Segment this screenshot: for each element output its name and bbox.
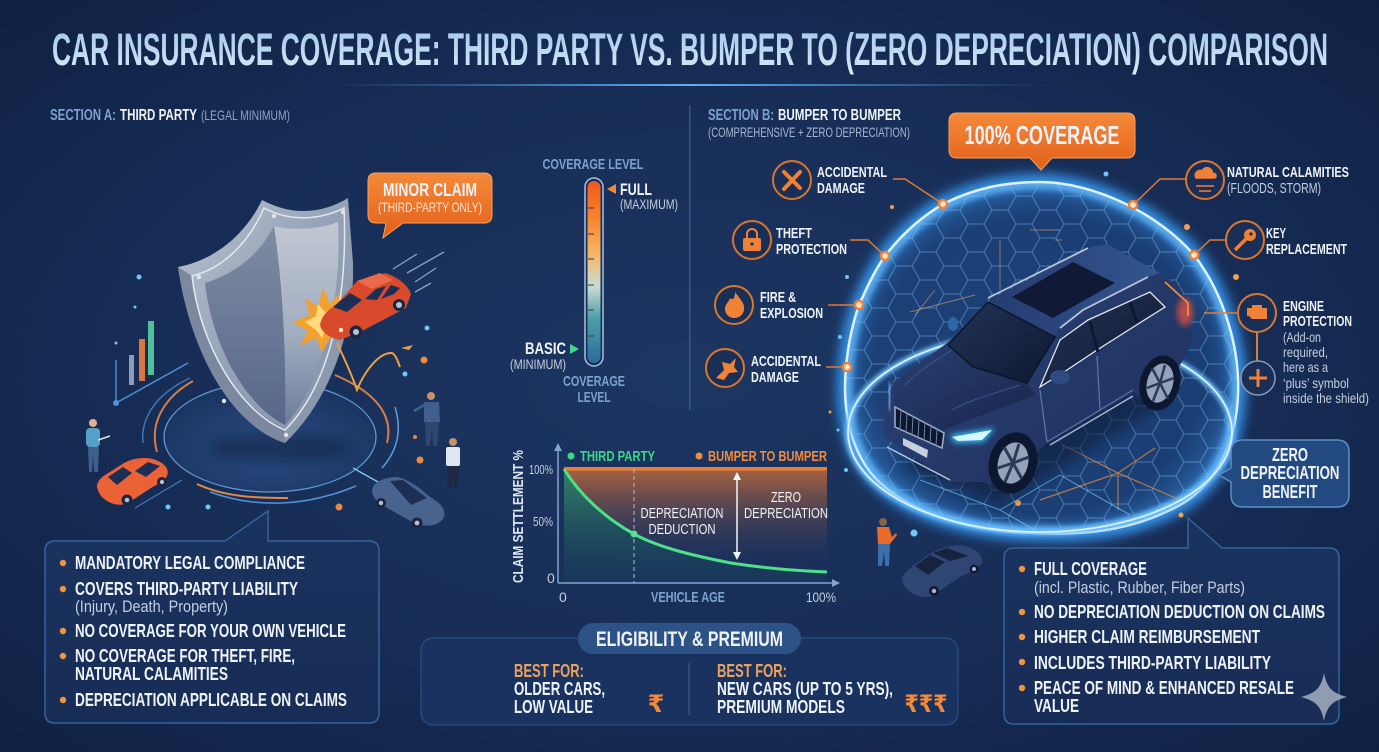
bounce arc [337, 343, 400, 390]
person with tablet [86, 419, 110, 472]
front wheel [982, 427, 1044, 499]
feature: key replacement: REPLACEMENT [1266, 241, 1347, 258]
coverage level gauge: COVERAGE LEVEL [542, 156, 644, 173]
coverage level gauge: FULL [620, 180, 652, 199]
icon: broken part [716, 358, 738, 380]
grille [895, 407, 944, 448]
dome ring [848, 332, 1232, 532]
callout: minor claim: (THIRD-PARTY ONLY) [378, 199, 482, 215]
impact starburst [293, 288, 348, 352]
callout: zero depreciation benefit [1219, 440, 1349, 507]
windshield [948, 302, 1055, 383]
feature: theft protection: THEFT [776, 225, 812, 242]
headlights [889, 383, 995, 443]
side windows [1040, 292, 1165, 387]
feature: accidental damage lower: DAMAGE [751, 369, 799, 386]
red car crash [320, 273, 411, 340]
axis labels: 0 [559, 589, 567, 605]
door lines and sill [1040, 356, 1133, 442]
section B heading: (COMPREHENSIVE + ZERO DEPRECIATION) [708, 124, 910, 140]
section A heading [50, 107, 290, 124]
coverage level gauge: COVERAGE [563, 373, 625, 390]
callout: minor claim: MINOR CLAIM [383, 180, 477, 200]
best for bumper to bumper [717, 661, 948, 718]
feature: fire and explosion: FIRE & [760, 289, 796, 306]
icon: flame [725, 292, 744, 318]
taillight [1165, 282, 1193, 326]
panel: bumper to bumper features: (incl. Plastic, Rubber, Fiber Parts) [1034, 578, 1245, 597]
legend: THIRD PARTY [580, 448, 655, 465]
feature: engine protection: ENGINE [1283, 298, 1324, 315]
orange car [97, 458, 168, 506]
panel: third party features: NATURAL CALAMITIES [75, 664, 228, 684]
best for bumper to bumper: PREMIUM MODELS [717, 697, 845, 717]
icon: padlock [743, 229, 761, 251]
coverage level gauge: LEVEL [578, 389, 610, 406]
coverage level gauge: BASIC [525, 339, 566, 358]
feature: theft protection [733, 221, 889, 260]
roof rails [988, 248, 1148, 328]
eligibility heading: ELIGIBILITY & PREMIUM [596, 628, 783, 651]
feature: fire and explosion [715, 286, 863, 324]
feature: key replacement: KEY [1266, 225, 1286, 242]
person in suit [414, 392, 440, 446]
illustration: protective dome with SUV [830, 170, 1250, 545]
hood [893, 343, 1035, 430]
bumper to bumper line [564, 467, 827, 470]
feature: accidental damage top: ACCIDENTAL [817, 164, 887, 181]
eligibility heading [578, 623, 801, 654]
chart annotations: DEPRECIATION [640, 505, 724, 522]
speed lines [393, 252, 444, 292]
panel: bumper to bumper features: HIGHER CLAIM REIMBURSEMENT [1034, 627, 1260, 647]
callout: zero depreciation benefit: ZERO [1272, 445, 1308, 465]
dark car [902, 545, 982, 597]
panel: third party features: COVERS THIRD-PARTY LIABILITY [75, 579, 298, 599]
feature: engine protection: PROTECTION [1283, 313, 1352, 330]
roof [990, 244, 1160, 335]
panel: bumper to bumper features: INCLUDES THIRD-PARTY LIABILITY [1034, 653, 1271, 673]
panel: bumper to bumper features [1004, 518, 1339, 724]
dome glow [845, 182, 1238, 534]
section B heading: SECTION B: [708, 107, 774, 124]
SUV [883, 244, 1193, 505]
feature: accidental damage lower: ACCIDENTAL [751, 353, 821, 370]
feature: theft protection: PROTECTION [776, 241, 847, 258]
zero depreciation arrow [733, 472, 741, 560]
chart: claim settlement vs vehicle age [510, 443, 840, 606]
axis labels [510, 450, 836, 606]
person with phone [877, 518, 897, 566]
callout: zero depreciation benefit: DEPRECIATION [1240, 463, 1340, 483]
best for third party: BEST FOR: [514, 661, 584, 681]
mirrors [1050, 370, 1070, 384]
feature: engine protection: ‘plus’ symbol [1283, 375, 1349, 391]
section B heading [708, 107, 910, 140]
axis labels: CLAIM SETTLEMENT % [510, 450, 527, 583]
panel: bumper to bumper features: FULL COVERAGE [1034, 559, 1147, 579]
icon: engine [1247, 305, 1267, 319]
best for bumper to bumper: BEST FOR: [717, 661, 787, 681]
area fills [564, 469, 827, 583]
coverage level gauge: (MINIMUM) [510, 356, 566, 372]
chart annotations: ZERO [771, 489, 801, 506]
icon: key [1235, 229, 1256, 250]
icon: tools [784, 172, 800, 189]
panel: third party features: DEPRECIATION APPLICABLE ON CLAIMS [75, 690, 347, 710]
axis labels: 100% [806, 589, 836, 605]
best for third party: OLDER CARS, [514, 679, 605, 699]
glowing dots [114, 274, 430, 510]
glowing dots around dome [828, 172, 1239, 536]
callout: 100% coverage [949, 113, 1135, 170]
panel: bumper to bumper features: PEACE OF MIND & ENHANCED RESALE [1034, 678, 1294, 698]
feature: accidental damage lower [706, 349, 851, 387]
callout: minor claim [368, 173, 492, 238]
panel: third party features: (Injury, Death, Property) [75, 597, 228, 616]
shield [178, 198, 353, 462]
dome body [846, 183, 1237, 532]
feature: fire and explosion: EXPLOSION [760, 305, 823, 322]
coverage level gauge: (MAXIMUM) [620, 196, 678, 212]
panel: third party features: NO COVERAGE FOR THEFT, FIRE, [75, 646, 295, 666]
section A heading: THIRD PARTY [120, 107, 197, 124]
icon: plus [1241, 361, 1275, 395]
legend: BUMPER TO BUMPER [708, 448, 827, 465]
section B heading: BUMPER TO BUMPER [778, 107, 901, 124]
feature: engine protection: here as a [1283, 359, 1328, 375]
icon: sparkle watermark [1301, 673, 1347, 721]
chart annotations [640, 489, 828, 538]
axis labels: 50% [533, 514, 553, 529]
axis labels: 0 [547, 570, 555, 586]
floor rings [135, 375, 398, 508]
panel: third party features: NO COVERAGE FOR YOUR OWN VEHICLE [75, 621, 346, 641]
blue car [372, 477, 444, 528]
callout: zero depreciation benefit: BENEFIT [1262, 482, 1318, 502]
feature: engine protection [1204, 294, 1369, 406]
best for third party: LOW VALUE [514, 697, 593, 717]
feature: accidental damage top: DAMAGE [817, 180, 865, 197]
coverage level gauge [510, 156, 678, 406]
icon: storm cloud [1195, 168, 1216, 191]
plate [903, 438, 928, 458]
vertical divider [689, 105, 690, 410]
legend [568, 448, 827, 465]
section A heading: (LEGAL MINIMUM) [201, 107, 290, 123]
sunroof [1012, 262, 1115, 318]
best for bumper to bumper: ₹₹₹ [904, 690, 948, 718]
person with white shirt [446, 438, 460, 488]
best for third party: ₹ [648, 690, 664, 718]
chart annotations: DEPRECIATION [744, 505, 828, 522]
section A heading: SECTION A: [50, 107, 116, 124]
feature: natural calamities: (FLOODS, STORM) [1227, 180, 1321, 197]
feature: key replacement [1190, 221, 1347, 259]
feature: engine protection: required, [1283, 344, 1328, 360]
best for third party [514, 661, 664, 718]
panel: eligibility and premium [421, 623, 958, 725]
best for bumper to bumper: NEW CARS (UP TO 5 YRS), [717, 679, 893, 699]
rear wheel [1133, 351, 1187, 415]
panel: third party features [45, 511, 379, 723]
feature: accidental damage top [773, 161, 947, 208]
callout: 100% coverage: 100% COVERAGE [964, 120, 1120, 150]
panel: bumper to bumper features: VALUE [1034, 696, 1079, 716]
axis labels: VEHICLE AGE [651, 589, 725, 606]
axes [558, 446, 836, 583]
third party curve [564, 469, 827, 572]
illustration: third party shield scene [86, 198, 460, 528]
dome outline [845, 182, 1238, 534]
mini bar chart [113, 321, 188, 406]
panel: third party features: MANDATORY LEGAL COMPLIANCE [75, 553, 305, 573]
axis labels: 100% [529, 462, 553, 477]
feature: engine protection: (Add-on [1283, 329, 1321, 345]
feature: natural calamities [1129, 161, 1349, 209]
chart annotations: DEDUCTION [648, 521, 716, 538]
